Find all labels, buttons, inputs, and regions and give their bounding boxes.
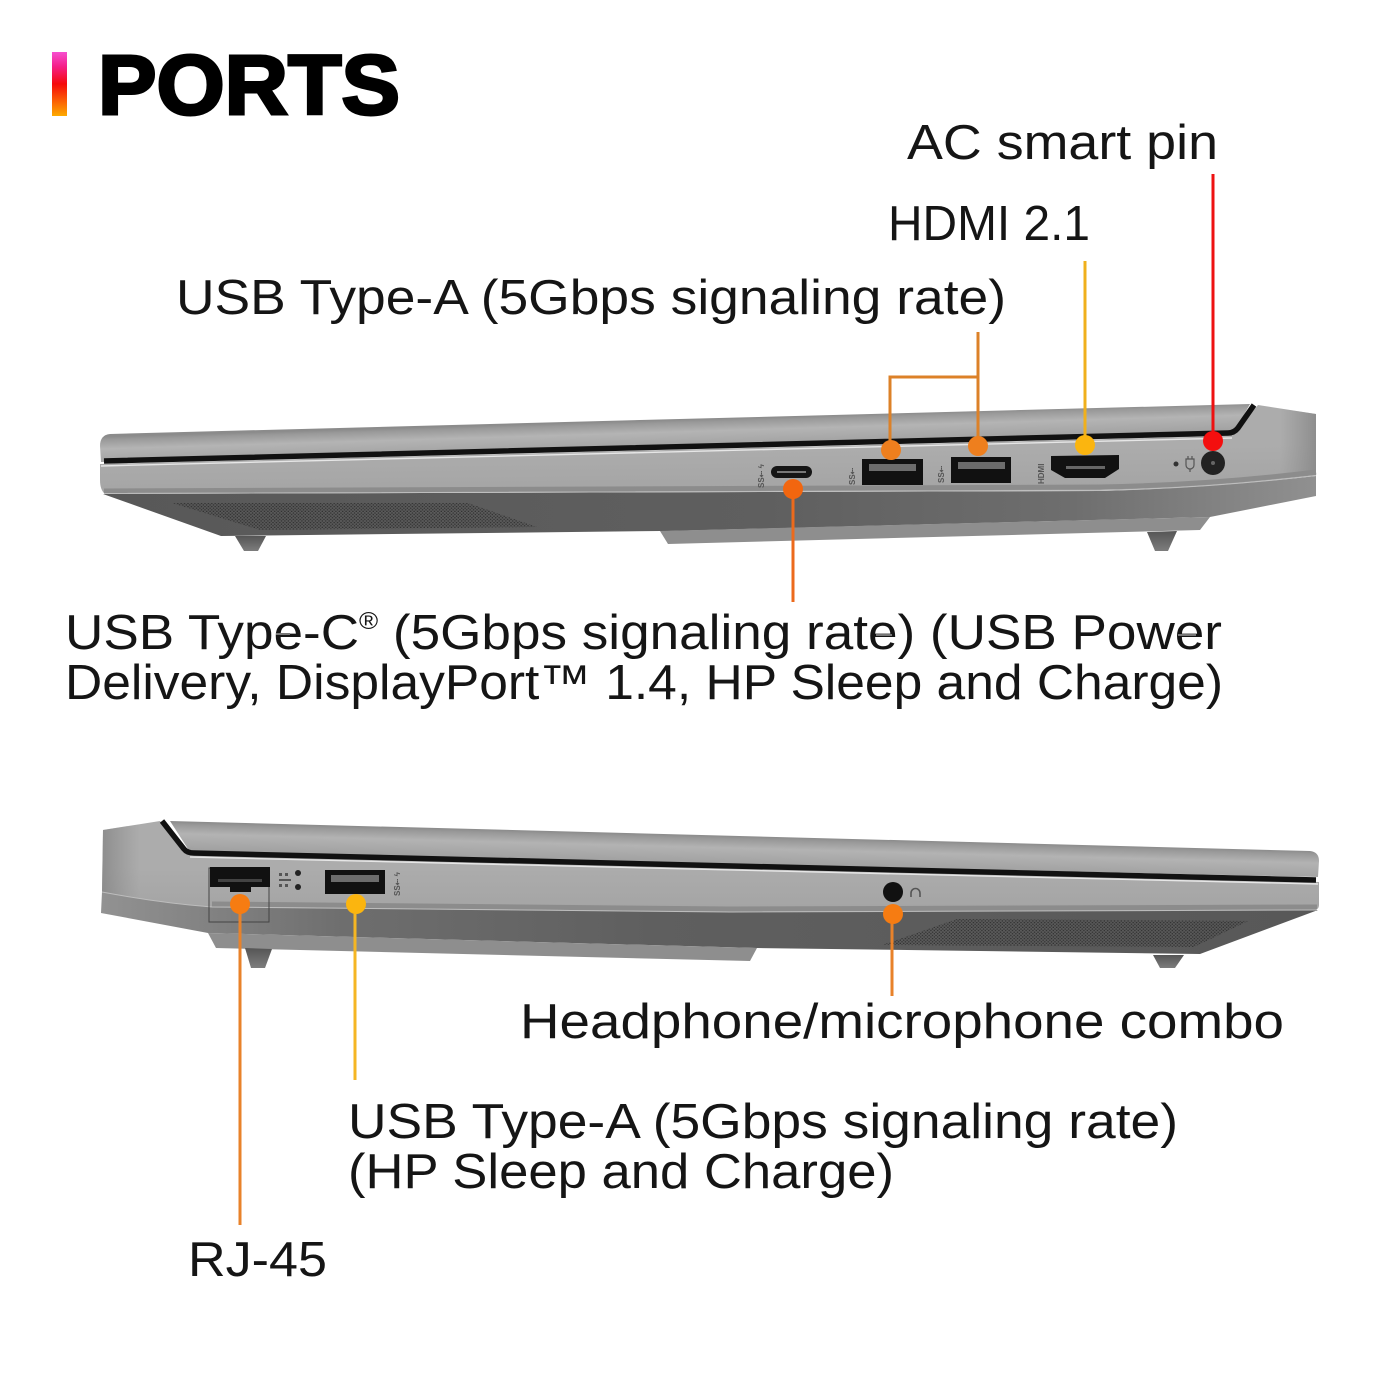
USB-A bracket: [890, 332, 978, 450]
label: USB Type-C: [65, 606, 1223, 710]
rubber foot left: [245, 948, 272, 968]
LED indicator: [1174, 462, 1178, 466]
rubber foot right: [1147, 531, 1177, 551]
RJ-45 port: [209, 867, 270, 922]
USB-A leader: [354, 904, 356, 1080]
label: AC smart pin: AC smart pin: [907, 116, 1218, 170]
underside: [103, 476, 1316, 536]
title: PORTS: [98, 38, 400, 132]
RJ-45 leader: [238, 904, 242, 1225]
center base strip: [660, 517, 1210, 544]
label: RJ-45: RJ-45: [188, 1233, 327, 1287]
underside: [101, 892, 1318, 954]
lid: [100, 404, 1250, 462]
label: USB Type-C: Delivery, DisplayPort™ 1.4, HP Sleep and Charge): [65, 656, 1223, 710]
status LEDs: [295, 870, 301, 890]
hinge gap: [162, 821, 1316, 880]
USB-A port: [325, 870, 385, 894]
body edge highlight: [102, 892, 1316, 912]
rubber foot right: [1153, 955, 1184, 968]
USB-A legend 2: SS⇠: [937, 465, 946, 483]
USB-A legend: SS⇠ ϟ: [393, 871, 402, 896]
lid: [170, 821, 1319, 877]
HDMI leader: [1084, 261, 1086, 445]
laptop: left side view: [101, 821, 1319, 968]
USB-C port: [771, 466, 812, 478]
HDMI port: [1051, 455, 1119, 478]
label: USB Type-A top: USB Type-A (5Gbps signaling rate): [176, 271, 1006, 325]
USB-A port 2: [951, 457, 1011, 483]
USB-C dot: [783, 479, 803, 499]
audio leader: [890, 914, 894, 996]
RJ-45 dot: [230, 894, 250, 914]
label: USB Type-C: ®: [359, 608, 379, 635]
label: USB Type-A bottom: [348, 1095, 1178, 1199]
right end shading: [1280, 408, 1316, 480]
USB-A legend 1: SS⇠: [848, 467, 857, 485]
base body: [102, 821, 1319, 912]
network icon: [279, 873, 291, 887]
callouts: right side view: [783, 174, 1223, 602]
body edge highlight: [104, 476, 1316, 494]
label: headphone combo: Headphone/microphone combo: [520, 995, 1284, 1049]
lower body shading: [104, 472, 1316, 491]
USB-A dot 1: [881, 440, 901, 460]
USB-C legend: SS⇠ ϟ: [757, 463, 766, 488]
AC pin dot: [1203, 431, 1223, 451]
HDMI legend: HDMI: [1037, 464, 1046, 484]
laptop: right side view: [100, 404, 1316, 551]
label: USB Type-A bottom: (HP Sleep and Charge): [348, 1145, 894, 1199]
USB-A dot 2: [968, 436, 988, 456]
speaker grille: [882, 919, 1248, 947]
speaker grille: [172, 503, 537, 530]
center base strip: [208, 933, 757, 961]
label: USB Type-C: (5Gbps signaling rate) (USB Power: [378, 606, 1222, 660]
lower body shading: [212, 904, 1317, 909]
label: USB Type-C: USB Type-C: [65, 606, 336, 660]
headphone icon: [911, 888, 920, 897]
accent bar: [52, 52, 67, 116]
AC smart pin port: [1201, 451, 1225, 475]
callouts: left side view: [230, 894, 903, 1225]
rubber foot left: [235, 536, 266, 551]
label: USB Type-A bottom: USB Type-A (5Gbps signaling rate): [348, 1095, 1178, 1149]
highlight line: [101, 438, 1232, 466]
audio jack: [883, 882, 903, 902]
HDMI dot: [1075, 435, 1095, 455]
USB-A port 1: [862, 459, 923, 485]
AC pin leader: [1212, 174, 1214, 441]
audio dot: [883, 904, 903, 924]
label: HDMI 2.1: HDMI 2.1: [888, 197, 1090, 251]
base body: [100, 405, 1316, 494]
power icon: [1186, 456, 1194, 472]
hinge gap: [104, 405, 1254, 461]
left end shading: [102, 824, 140, 899]
USB-A dot: [346, 894, 366, 914]
USB-C leader: [792, 489, 794, 602]
highlight line: [190, 857, 1318, 884]
